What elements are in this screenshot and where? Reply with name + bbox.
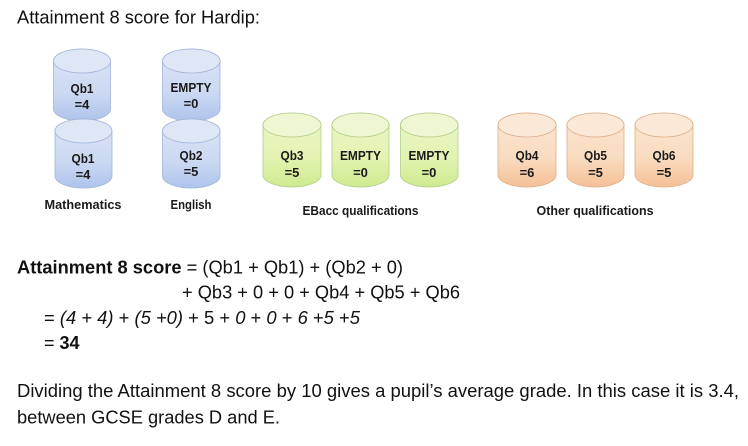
- cylinder: Other Qb5: Qb5: [584, 148, 607, 163]
- cylinder: EBacc EMPTY 2: =0: [422, 165, 436, 180]
- cylinder: Other Qb4: Qb4: [516, 148, 539, 163]
- cylinder: Mathematics upper Qb1: [54, 49, 110, 121]
- cylinder: Mathematics lower Qb1: Qb1: [72, 151, 94, 166]
- cylinder: English Qb2: [162, 119, 220, 188]
- cylinder: Other Qb6: [635, 113, 693, 187]
- cylinder: EBacc EMPTY 1: EMPTY: [340, 148, 381, 163]
- formula result: = 34: [44, 333, 80, 353]
- cylinder: EBacc Qb3: [263, 113, 321, 187]
- cylinder: Other Qb4: =6: [520, 165, 534, 180]
- formula line 1: Attainment 8 score = (Qb1 + Qb1) + (Qb2 + 0): [17, 258, 403, 278]
- cylinder: EBacc EMPTY 1: =0: [353, 165, 368, 180]
- cylinder: Other Qb4: [498, 113, 556, 187]
- formula line 3: = (4 + 4) + (5 +0) + 5 + 0 + 0 + 6 +5 +5: [44, 308, 361, 328]
- cylinder: Other Qb5: =5: [588, 165, 603, 180]
- cylinder: EBacc Qb3: =5: [285, 165, 299, 180]
- label: EBacc qualifications: EBacc qualifications: [302, 203, 418, 218]
- cylinder: English EMPTY: EMPTY: [170, 80, 212, 95]
- cylinder: English Qb2: =5: [184, 164, 198, 179]
- cylinder: Other Qb6: Qb6: [652, 148, 676, 163]
- cylinder: English Qb2: Qb2: [180, 148, 202, 163]
- cylinder: EBacc Qb3: Qb3: [280, 148, 304, 163]
- cylinder: Mathematics upper Qb1: Qb1: [70, 81, 94, 96]
- cylinder: Mathematics lower Qb1: =4: [76, 167, 91, 182]
- label: Other qualifications: Other qualifications: [536, 203, 654, 218]
- title: Attainment 8 score for Hardip:: [17, 8, 260, 28]
- explanation line 2: between GCSE grades D and E.: [17, 408, 280, 428]
- explanation line 1: Dividing the Attainment 8 score by 10 gives a pupil’s average grade. In this case it is 3.4,: [17, 381, 739, 401]
- cylinder: Other Qb6: =5: [657, 165, 671, 180]
- cylinder: English EMPTY: =0: [184, 96, 198, 111]
- cylinder: Mathematics lower Qb1: [55, 119, 112, 188]
- label: English: English: [170, 197, 212, 212]
- cylinder: Mathematics upper Qb1: =4: [75, 97, 90, 112]
- cylinder: EBacc EMPTY 2: [400, 113, 458, 187]
- cylinder: Other Qb5: [567, 113, 624, 187]
- cylinder: EBacc EMPTY 1: [332, 113, 389, 187]
- cylinder: EBacc EMPTY 2: EMPTY: [408, 148, 450, 163]
- label: Mathematics: Mathematics: [44, 197, 122, 212]
- formula line 2: + Qb3 + 0 + 0 + Qb4 + Qb5 + Qb6: [182, 282, 460, 302]
- cylinder: English EMPTY: [162, 49, 220, 121]
